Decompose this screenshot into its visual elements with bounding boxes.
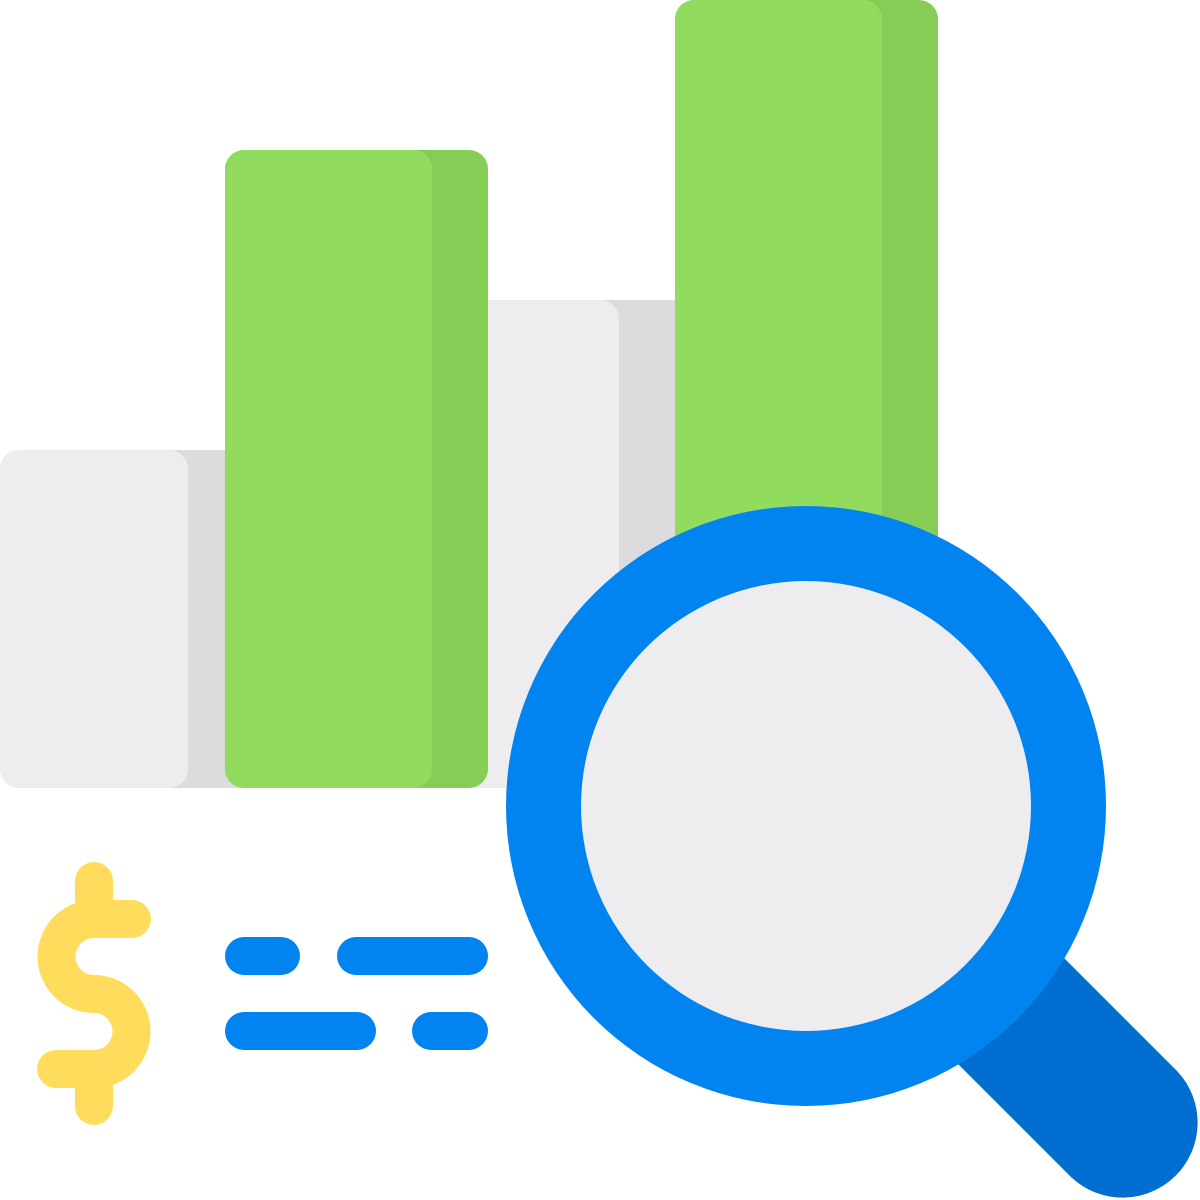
magnifier ring (506, 506, 1106, 1106)
text placeholder lines (225, 937, 488, 1050)
bar 2: green (225, 150, 488, 788)
icon: dollar sign (56, 881, 132, 1106)
icon: magnifying glass (506, 506, 1198, 1198)
magnifier handle (904, 904, 1198, 1198)
bar chart (0, 0, 938, 788)
magnifier lens (581, 581, 1031, 1031)
bar 4: green (675, 0, 938, 600)
bar 1: grey (0, 450, 240, 788)
bar 3: grey (470, 300, 690, 788)
